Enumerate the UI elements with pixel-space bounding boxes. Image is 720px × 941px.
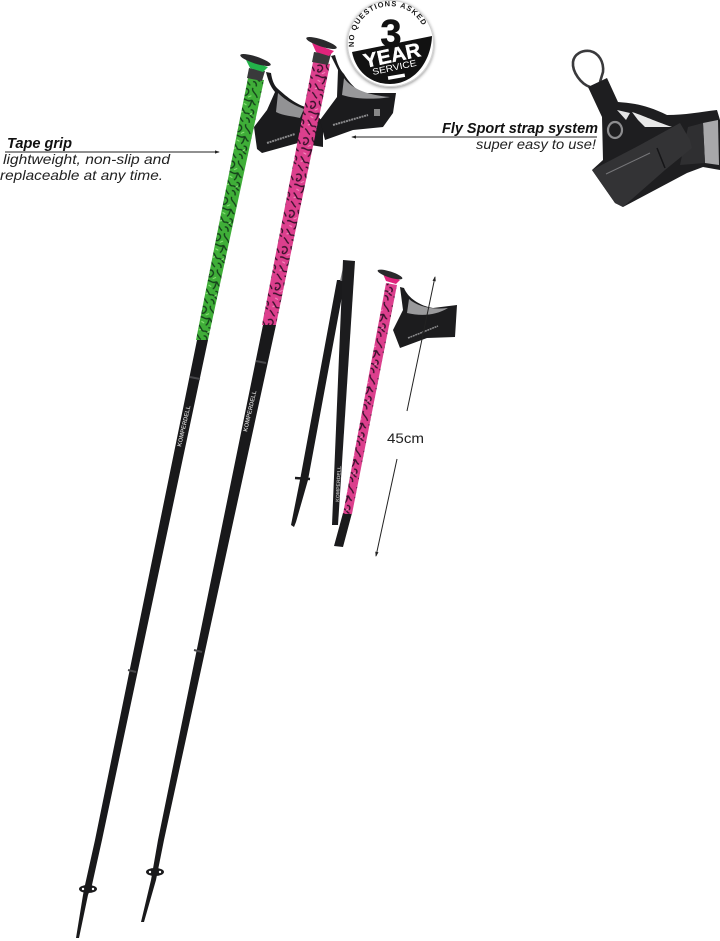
pink grip collar bbox=[312, 52, 331, 65]
dimension: 45cm bbox=[376, 277, 435, 556]
badge year: YEAR bbox=[361, 39, 423, 73]
tape grip description: replaceable at any time. bbox=[0, 167, 163, 183]
folded strap bbox=[393, 287, 457, 348]
folded outer section bbox=[291, 280, 345, 527]
badge arc text: NO QUESTIONS ASKED bbox=[348, 1, 426, 47]
green grip collar bbox=[247, 68, 265, 81]
strap system title: Fly Sport strap system bbox=[442, 121, 598, 137]
green pole shaft bbox=[76, 340, 208, 938]
warranty badge bbox=[344, 0, 436, 90]
pink pole bbox=[141, 35, 338, 922]
folded middle section bbox=[332, 260, 355, 525]
strap system arrow bbox=[352, 136, 597, 138]
strap detail photo bbox=[573, 51, 720, 207]
folded middle logo: KOMPERDELL bbox=[335, 466, 343, 502]
strap on pink pole bbox=[320, 55, 396, 140]
strap on green pole bbox=[254, 72, 323, 153]
tape grip arrow bbox=[5, 151, 219, 153]
folded pole bbox=[291, 260, 457, 547]
green pole logo: KOMPERDELL bbox=[177, 405, 192, 447]
pink pole logo: KOMPERDELL bbox=[243, 390, 258, 432]
strap loop bbox=[573, 51, 603, 87]
pink pole basket bbox=[146, 868, 164, 876]
pink pole shaft bbox=[141, 325, 276, 922]
tape grip description bbox=[0, 151, 171, 183]
strap velcro band bbox=[592, 123, 692, 207]
badge number: 3 bbox=[380, 13, 402, 55]
upper dimension arrow bbox=[407, 277, 435, 411]
dimension label: 45cm bbox=[387, 430, 424, 446]
strap system description: super easy to use! bbox=[476, 136, 596, 152]
tape grip description: lightweight, non-slip and bbox=[3, 151, 171, 167]
strap mesh panel bbox=[703, 120, 719, 165]
folded pink grip bbox=[343, 283, 397, 514]
green tape grip bbox=[196, 78, 264, 340]
callout: tape grip bbox=[0, 136, 219, 183]
pink pole handle top bbox=[305, 35, 338, 56]
tape grip title: Tape grip bbox=[7, 136, 72, 152]
pink tape grip bbox=[262, 62, 330, 325]
callout: strap system bbox=[352, 121, 598, 152]
green pole basket bbox=[79, 885, 97, 893]
folded grip handle bbox=[377, 268, 403, 284]
strap body bbox=[588, 78, 720, 207]
folded black tip bbox=[334, 513, 352, 547]
badge service: SERVICE bbox=[371, 58, 417, 77]
badge black band bbox=[352, 36, 432, 84]
green pole bbox=[76, 52, 272, 938]
green pole handle top bbox=[239, 52, 272, 72]
strap ring bbox=[608, 122, 622, 138]
lower dimension arrow bbox=[376, 459, 397, 556]
